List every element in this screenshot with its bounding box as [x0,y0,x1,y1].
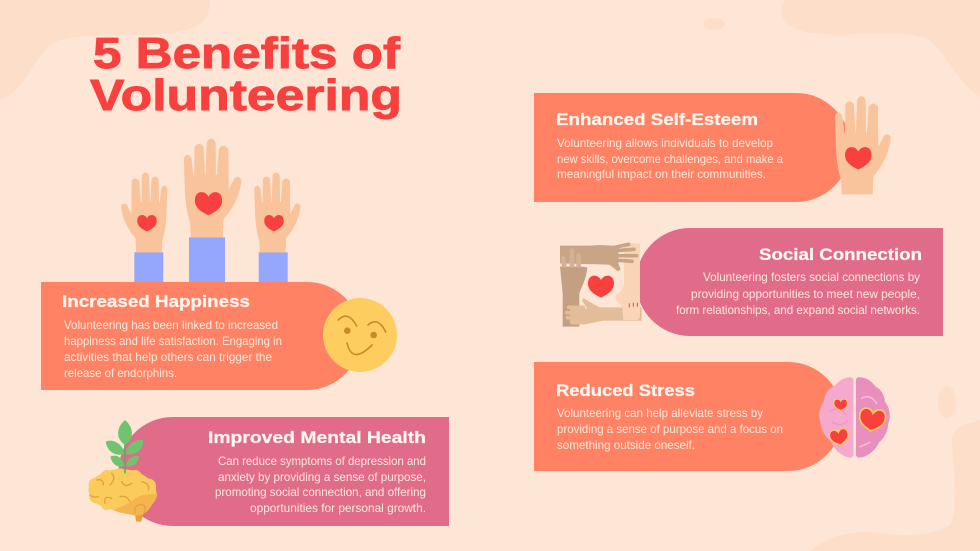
text block: increased happiness: happiness and life satisfaction. Engaging in [64,334,282,348]
text block: social connection [676,270,920,317]
title: 5 Benefits of [93,29,400,78]
text block: reduced stress: providing a sense of purpose and a focus on [557,422,783,436]
text block: increased happiness [64,318,282,380]
title: Volunteering [90,71,402,120]
icon: smiling face [323,298,397,372]
text block: reduced stress: something outside oneself. [557,438,695,452]
text block: improved mental health: opportunities for personal growth. [250,501,426,515]
icon: three raised hands with hearts [121,139,301,282]
text block: improved mental health [215,454,426,515]
text block: enhanced self-esteem: Volunteering allows individuals to develop [557,136,773,150]
text block: increased happiness: Volunteering has been linked to increased [64,318,278,332]
panel: increased happiness [41,282,361,390]
heading: enhanced self-esteem: Enhanced Self-Esteem [556,111,758,129]
heading: increased happiness: Increased Happiness [62,293,250,311]
heading: social connection: Social Connection [759,246,922,264]
text block: enhanced self-esteem: new skills, overcome challenges, and make a [557,152,783,166]
icon: yellow brain with sprout [88,420,157,522]
text block: improved mental health: promoting social connection, and offering [215,485,426,499]
heading: improved mental health: Improved Mental Health [208,429,426,447]
text block: reduced stress: Volunteering can help alleviate stress by [557,406,763,420]
panel: enhanced self-esteem [534,93,850,202]
panel: social connection [636,228,943,336]
text block: enhanced self-esteem: meaningful impact on their communities. [557,167,766,181]
panel: improved mental health [118,417,449,526]
icon: four linked hands with heart [560,243,642,327]
title [90,29,402,120]
text block: social connection: form relationships, and expand social networks. [676,303,920,317]
text block: improved mental health: Can reduce symptoms of depression and [218,454,426,468]
icon: raised hand with heart [835,96,891,194]
text block: reduced stress [557,406,783,452]
text block: social connection: providing opportunities to meet new people, [691,287,920,301]
panel: reduced stress [534,362,842,471]
text block: increased happiness: release of endorphins. [64,366,177,380]
heading: reduced stress: Reduced Stress [556,382,695,400]
text block: improved mental health: anxiety by providing a sense of purpose, [218,470,426,484]
text block: increased happiness: activities that help others can trigger the [64,350,272,364]
text block: enhanced self-esteem [557,136,783,181]
icon: pink brain with hearts [819,377,890,458]
text block: social connection: Volunteering fosters social connections by [703,270,920,284]
